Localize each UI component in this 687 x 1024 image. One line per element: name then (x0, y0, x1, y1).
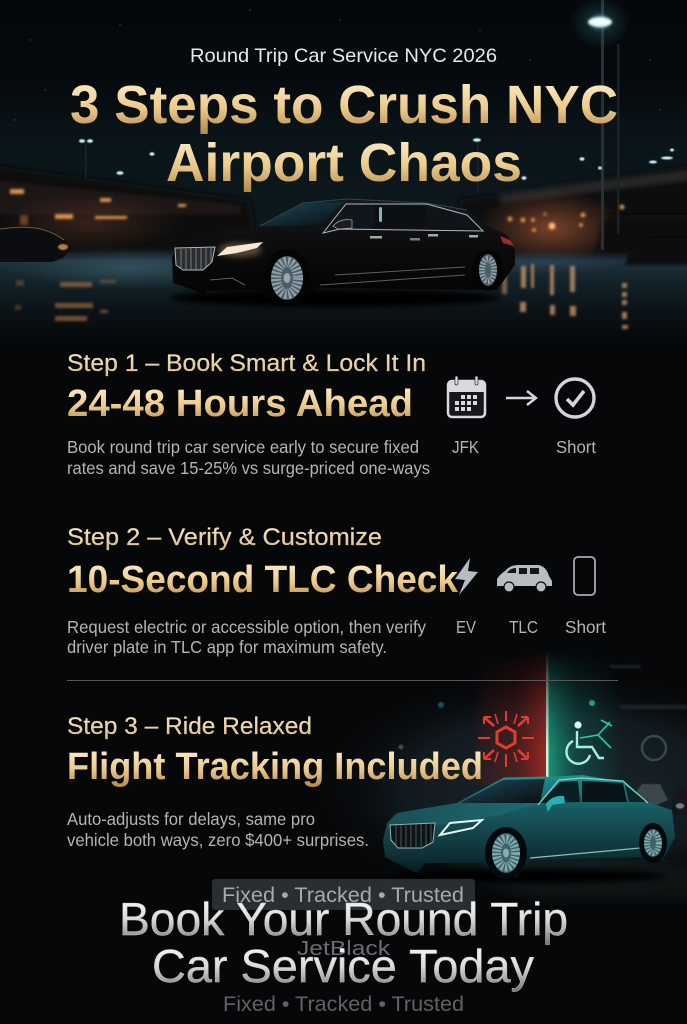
wet ground reflections (15, 264, 628, 329)
caption: Short: Short (556, 437, 596, 457)
caption: JFK: JFK (452, 437, 479, 457)
title (70, 75, 618, 193)
footer tagline: Fixed • Tracked • Trusted (223, 993, 464, 1016)
overpass lights (10, 189, 624, 232)
icon: wheelchair (566, 720, 612, 764)
step 1 body: Book round trip car service early to secure fixed (67, 437, 419, 457)
icon: van (497, 565, 552, 592)
title: 3 Steps to Crush NYC (70, 75, 618, 135)
pill: Fixed Tracked Trusted (212, 879, 475, 910)
step 1 body: rates and save 15-25% vs surge-priced one-ways (67, 458, 430, 478)
icon: black limousine (170, 199, 515, 307)
panel: step 1 (67, 350, 596, 478)
caption: EV: EV (456, 617, 476, 637)
icon: lightning bolt (455, 558, 478, 595)
icon: check circle (556, 379, 594, 417)
background car left (0, 227, 70, 262)
lower photo: city backdrop with red and green glow (366, 653, 687, 898)
icon: calendar (448, 376, 485, 417)
icon: phone (574, 557, 595, 595)
call to action (119, 893, 568, 992)
step 3 body (67, 809, 369, 850)
step 2 label: Step 2 – Verify & Customize (67, 524, 382, 551)
hero photo: airport at night (0, 0, 687, 345)
subtitle: Round Trip Car Service NYC 2026 (190, 45, 497, 67)
divider (67, 680, 618, 681)
step 2 heading: 10-Second TLC Check (67, 559, 459, 601)
caption: TLC: TLC (509, 617, 538, 637)
background car right (625, 238, 687, 265)
icon: red flight burst (478, 711, 534, 767)
step 3 body: vehicle both ways, zero $400+ surprises. (67, 830, 369, 850)
step 3 label: Step 3 – Ride Relaxed (67, 713, 312, 740)
title: Airport Chaos (166, 133, 522, 193)
street lamps (79, 0, 674, 250)
brand: JetBlack: JetBlack (297, 938, 391, 960)
step 2 body (67, 617, 426, 657)
step 2 body: Request electric or accessible option, then verify (67, 617, 426, 637)
overpass right (460, 165, 687, 262)
panel: step 3 (67, 711, 675, 1016)
pill: Fixed Tracked Trusted: Fixed • Tracked • Trusted (222, 884, 464, 907)
call to action: Car Service Today (152, 940, 534, 992)
panel: step 2 (67, 524, 606, 657)
step 3 heading: Flight Tracking Included (67, 746, 483, 788)
overpass left (0, 165, 260, 262)
step 3 body: Auto-adjusts for delays, same pro (67, 809, 315, 829)
step 1 heading: 24-48 Hours Ahead (67, 383, 413, 425)
icon: arrow (506, 391, 536, 405)
background traffic (636, 784, 687, 815)
step 1 body (67, 437, 430, 478)
step 1 label: Step 1 – Book Smart & Lock It In (67, 350, 426, 377)
caption: Short: Short (565, 617, 606, 637)
icon: teal sedan (383, 775, 675, 883)
call to action: Book Your Round Trip (119, 893, 568, 945)
step 2 body: driver plate in TLC app for maximum safety. (67, 637, 387, 657)
